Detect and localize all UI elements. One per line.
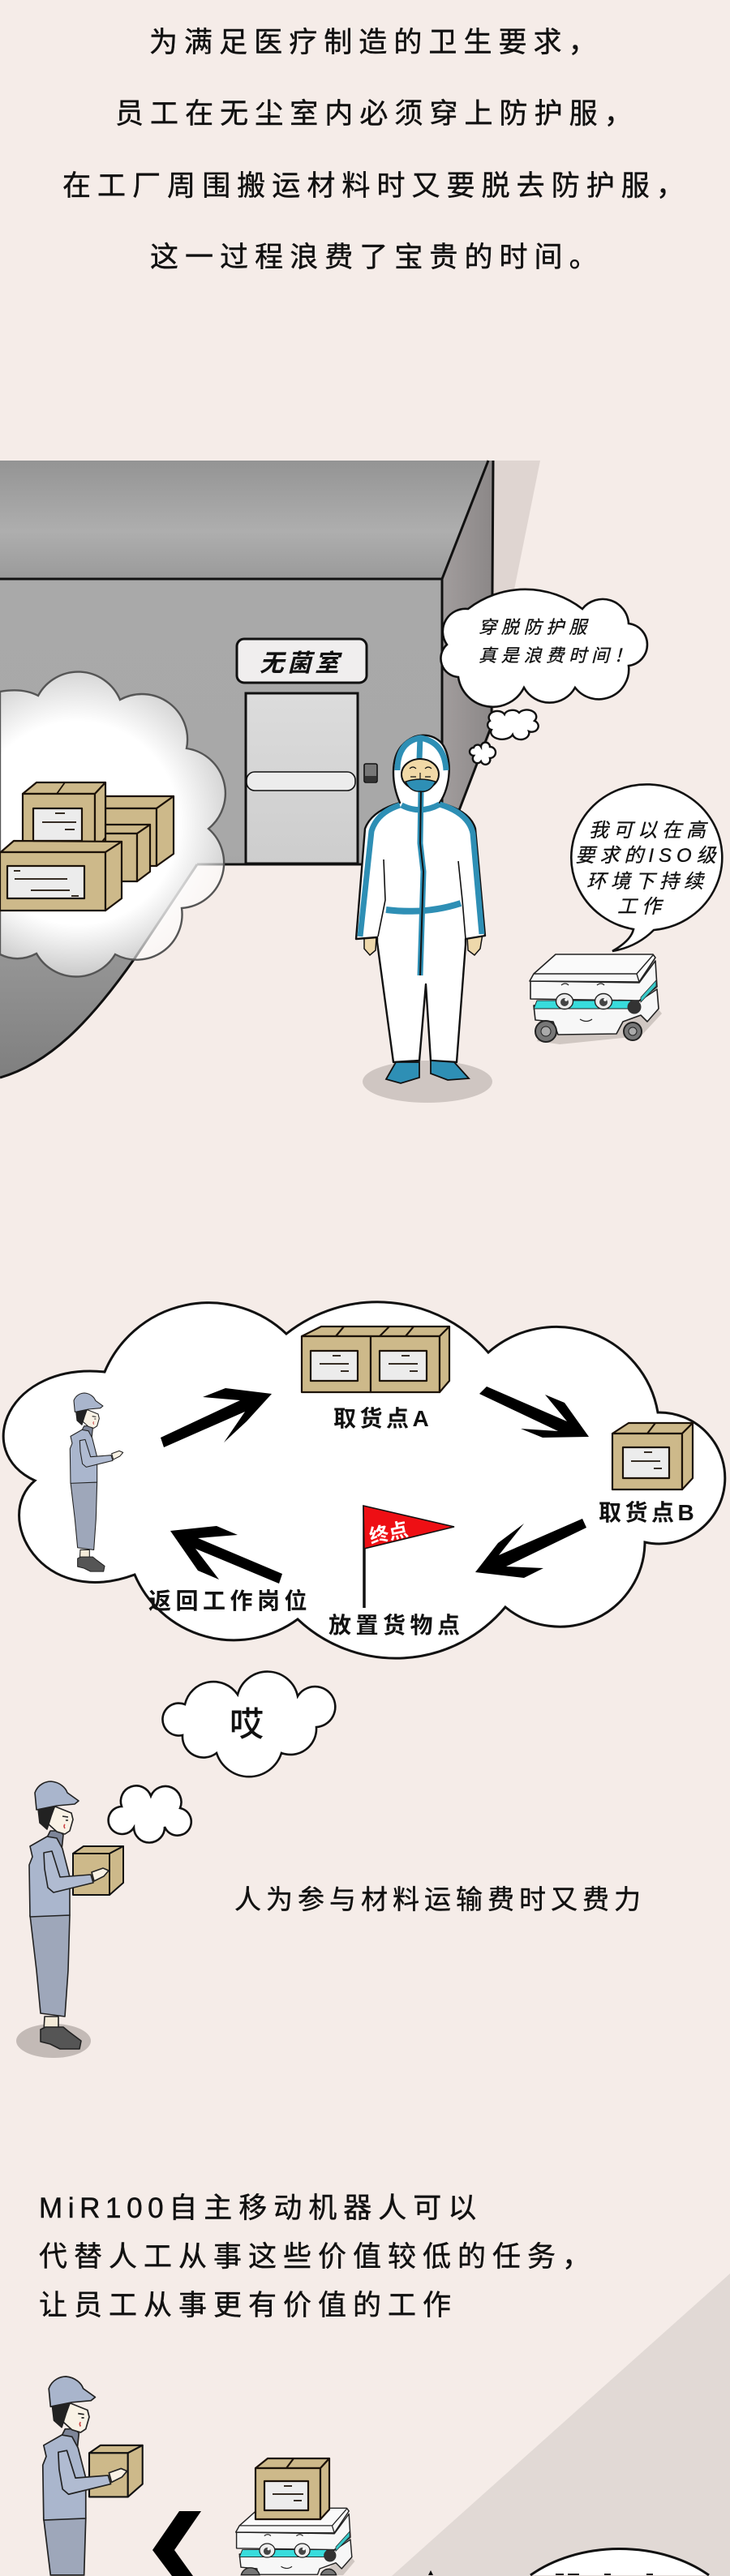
speech bubble: robot: 工作 <box>617 896 666 918</box>
arrow 2 <box>479 1387 589 1438</box>
worker 2 carrying box <box>43 2377 143 2575</box>
scene: clean room building <box>0 461 540 1078</box>
label: drop point: 放置货物点 <box>328 1613 465 1638</box>
robot 2 with box <box>236 2458 354 2575</box>
bottom speech bubble <box>530 2548 709 2575</box>
arrow 1 <box>161 1388 272 1447</box>
door sign: 无菌室 <box>260 650 342 677</box>
chevron arrow <box>152 2511 201 2576</box>
sigh cloud: 哎 <box>230 1705 264 1743</box>
big cycle cloud <box>3 1302 725 1658</box>
door <box>246 693 358 864</box>
text: MiR100: 让员工从事更有价值的工作 <box>39 2290 457 2321</box>
boxes: pickup A <box>302 1327 449 1392</box>
speech bubble: robot: 要求的ISO级 <box>575 845 721 867</box>
hazmat person shadow <box>363 1061 492 1103</box>
thought bubble <box>440 589 647 707</box>
text: MiR100: 代替人工从事这些价值较低的任务， <box>39 2241 597 2273</box>
box on robot <box>256 2458 329 2519</box>
label: pickup A: 取货点A <box>333 1406 432 1431</box>
flag <box>363 1506 454 1608</box>
intro text: 这一过程浪费了宝贵的时间。 <box>150 242 604 273</box>
card reader <box>364 764 377 782</box>
intro text <box>62 27 691 273</box>
hazmat worker <box>356 735 485 1083</box>
robot 1 <box>530 954 662 1044</box>
speech bubble: robot <box>571 784 722 951</box>
arrow 4 <box>170 1526 282 1584</box>
worker carrying box <box>29 1781 123 2049</box>
background wedge <box>392 2274 730 2576</box>
flag: 终点 <box>367 1519 410 1548</box>
intro text: 员工在无尘室内必须穿上防护服， <box>115 98 639 130</box>
label: return to post: 返回工作岗位 <box>148 1588 311 1614</box>
intro text: 为满足医疗制造的卫生要求， <box>149 27 603 58</box>
small thought puffs <box>470 709 539 765</box>
thought cloud: boxes <box>0 672 225 977</box>
carried box <box>73 1846 123 1895</box>
text: human transport: 人为参与材料运输费时又费力 <box>234 1884 646 1914</box>
speech bubble: robot: 我可以在高 <box>589 820 711 842</box>
thought bubble: 真是浪费时间！ <box>479 645 637 666</box>
text: MiR100 <box>39 2192 597 2321</box>
small puff <box>109 1785 191 1842</box>
speech bubble: robot: 环境下持续 <box>586 871 708 893</box>
worker in cloud <box>70 1393 123 1571</box>
door sign <box>237 639 367 683</box>
box 2 <box>89 2445 143 2497</box>
sigh cloud <box>162 1672 335 1777</box>
worker shadow <box>16 2024 91 2058</box>
label: pickup B: 取货点B <box>599 1500 698 1525</box>
thought bubble: 穿脱防护服 <box>479 617 591 637</box>
box: pickup B <box>612 1423 693 1489</box>
intro text: 在工厂周围搬运材料时又要脱去防护服， <box>62 170 691 202</box>
stacked boxes <box>0 782 174 911</box>
partial arrow tip <box>428 2570 433 2575</box>
text: MiR100: MiR100自主移动机器人可以 <box>39 2192 483 2224</box>
arrow 3 <box>475 1519 586 1578</box>
